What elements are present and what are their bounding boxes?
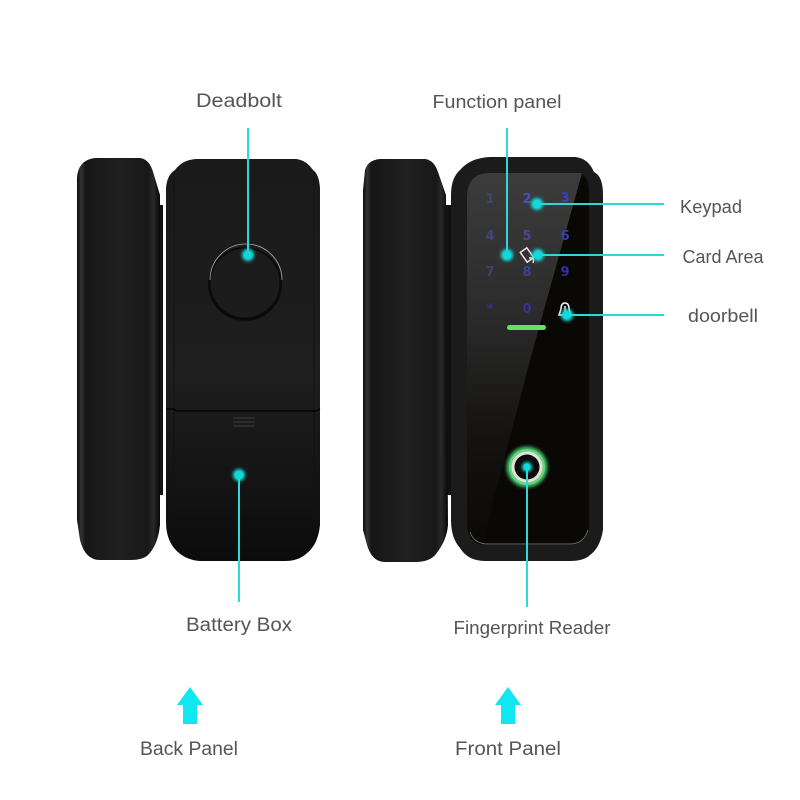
keypad digits: 5: [522, 229, 532, 244]
keypad digits: 9: [560, 265, 570, 280]
keypad digits: 1: [485, 192, 495, 207]
callout: Keypad: Keypad: [680, 197, 742, 217]
arrow: back panel: [177, 687, 203, 724]
callout: Battery Box: [186, 469, 293, 636]
deadbolt knob: [208, 244, 282, 321]
back panel: side view of lock: [77, 158, 163, 560]
front panel: main body: [451, 157, 603, 561]
callout: Deadbolt: Deadbolt: [196, 91, 283, 112]
keypad digits: 6: [560, 229, 570, 244]
front panel: side view of lock: [363, 159, 452, 562]
callout: doorbell: doorbell: [688, 306, 758, 326]
callout: Function panel: [432, 92, 562, 261]
fingerprint reader: [506, 446, 548, 488]
keypad digits: *: [487, 302, 494, 317]
label: Back Panel: Back Panel: [140, 739, 238, 760]
keypad digits: 0: [522, 302, 532, 317]
callout: Card Area: [532, 247, 764, 267]
status light bar: [507, 325, 546, 330]
icon: card area: [520, 248, 534, 263]
callout: Keypad: [531, 197, 742, 217]
glass panel: [467, 173, 589, 545]
keypad digits: 7: [485, 265, 495, 280]
callout: Fingerprint Reader: [454, 462, 611, 638]
callout: Deadbolt: [196, 91, 283, 261]
callout: Battery Box: Battery Box: [186, 615, 293, 636]
keypad digits: [485, 191, 570, 317]
label: Front Panel: Front Panel: [455, 739, 561, 760]
callout: Card Area: Card Area: [682, 247, 764, 267]
callout: Fingerprint Reader: Fingerprint Reader: [454, 618, 611, 638]
keypad digits: 2: [522, 192, 532, 207]
arrow: front panel: [495, 687, 521, 724]
keypad digits: 3: [560, 191, 570, 206]
keypad digits: 4: [485, 229, 495, 244]
keypad digits: 8: [522, 265, 532, 280]
back panel: main body: [166, 159, 320, 561]
callout: Function panel: Function panel: [432, 92, 562, 112]
icon: doorbell: [559, 303, 571, 315]
callout: doorbell: [561, 306, 758, 326]
seam of battery cover: [166, 409, 320, 411]
battery cover latch: [233, 418, 255, 426]
